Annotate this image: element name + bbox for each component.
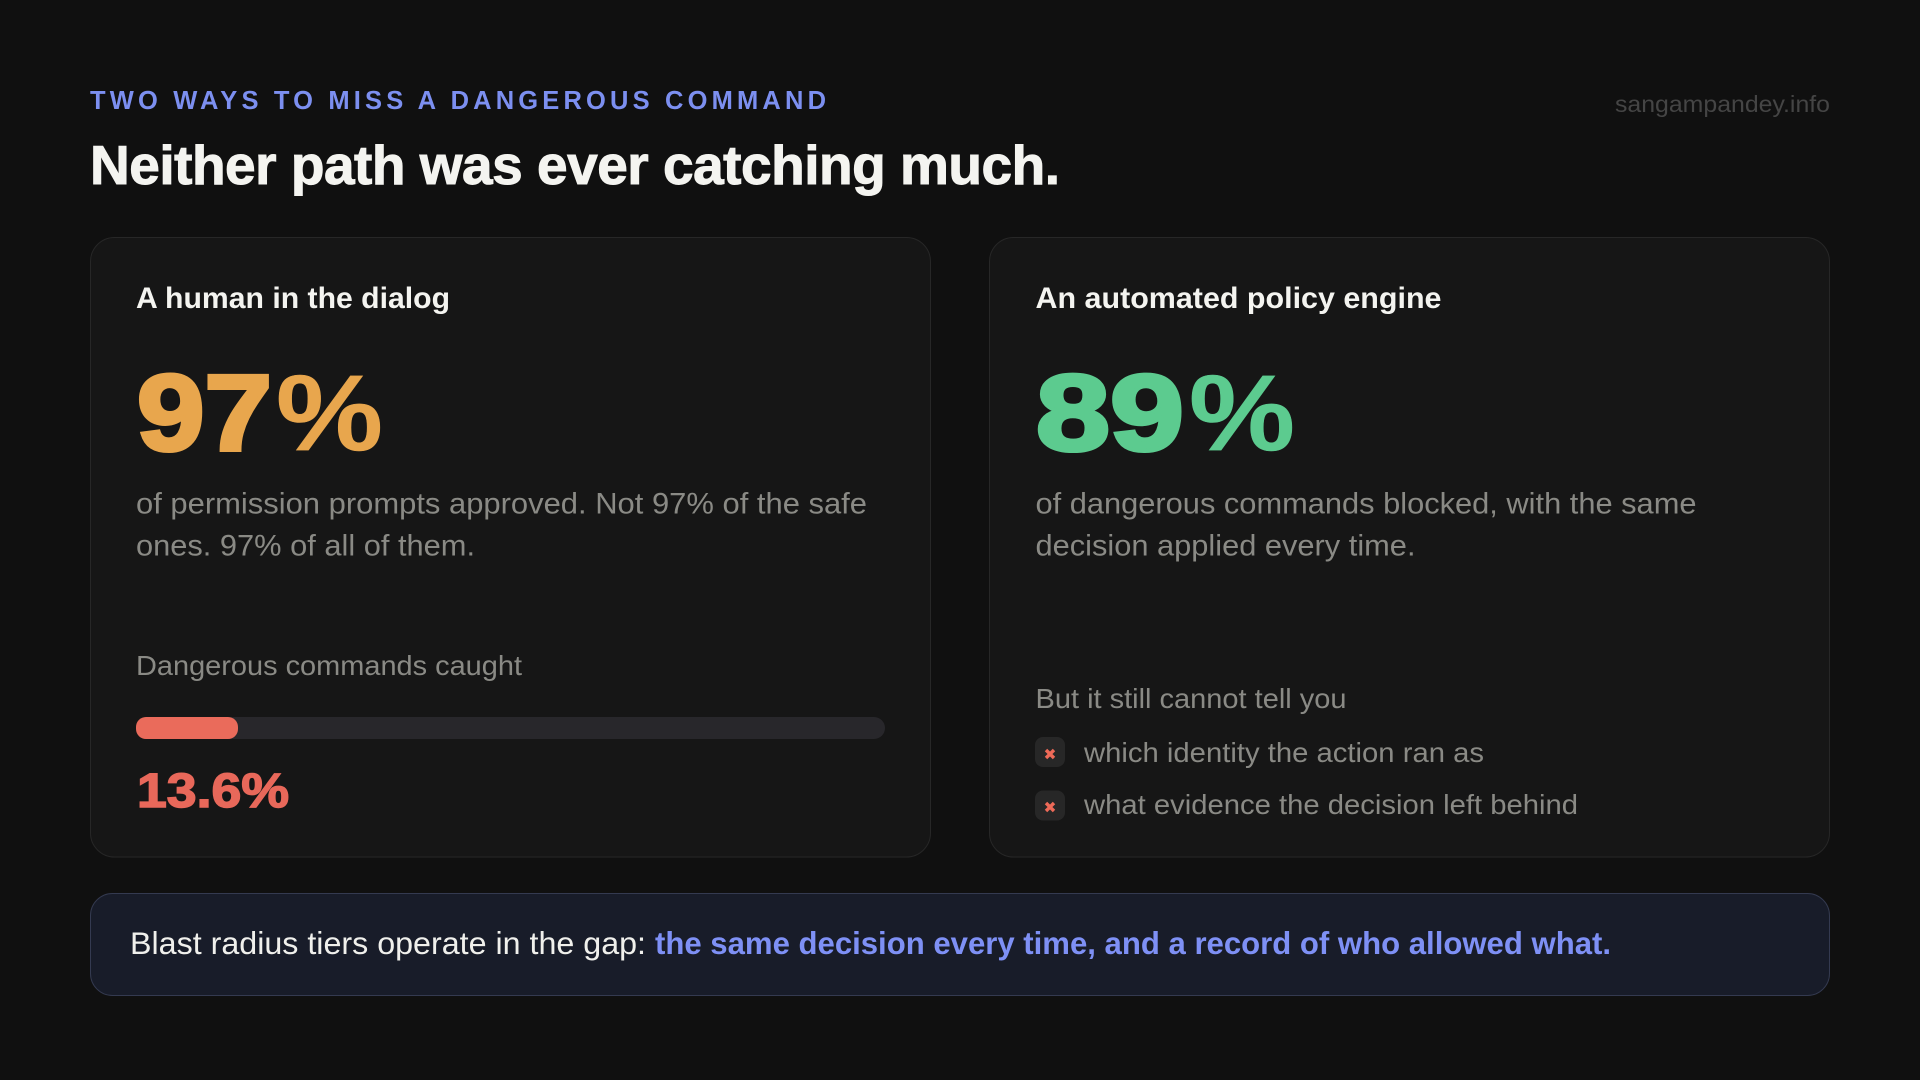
big stat: 97%: 97	[137, 352, 272, 473]
description: human: ones. 97% of all of them.	[136, 530, 475, 562]
bar label: Dangerous commands caught	[136, 650, 522, 681]
description: human	[136, 488, 867, 562]
callout banner	[90, 894, 1830, 996]
progress bar: 13.6% caught	[136, 717, 885, 739]
big stat: 97%	[137, 352, 383, 473]
title: Neither path was ever catching much.	[90, 134, 1060, 196]
description: engine	[1036, 488, 1696, 562]
callout lead text: Blast radius tiers operate in the gap:	[130, 925, 646, 961]
list item 1: which identity the action ran as	[1083, 737, 1484, 768]
description: human: of permission prompts approved. Not 97% of the safe	[136, 488, 867, 520]
description: engine: of dangerous commands blocked, with the same	[1036, 488, 1696, 520]
big stat: 97%: %	[276, 352, 383, 473]
big stat: 89%: 89	[1036, 352, 1184, 473]
panel heading: human: A human in the dialog	[136, 282, 450, 315]
callout emphasis text: the same decision every time, and a record of who allowed what.	[655, 925, 1611, 961]
panel heading: engine: An automated policy engine	[1036, 282, 1442, 315]
icon: x mark 1	[1035, 737, 1065, 767]
big stat: 89%	[1036, 352, 1295, 473]
stat: 13.6%: 13.6%	[137, 765, 289, 818]
description: engine: decision applied every time.	[1036, 530, 1416, 562]
panel: human in the dialog	[90, 238, 930, 857]
eyebrow heading: TWO WAYS TO MISS A DANGEROUS COMMAND	[90, 87, 826, 115]
list item 2: what evidence the decision left behind	[1083, 789, 1578, 820]
source watermark: sangampandey.info	[1615, 91, 1830, 117]
icon: x mark 2	[1035, 790, 1065, 820]
big stat: 89%: %	[1189, 352, 1295, 473]
list label: But it still cannot tell you	[1036, 683, 1346, 714]
panel: automated policy engine	[990, 238, 1830, 857]
